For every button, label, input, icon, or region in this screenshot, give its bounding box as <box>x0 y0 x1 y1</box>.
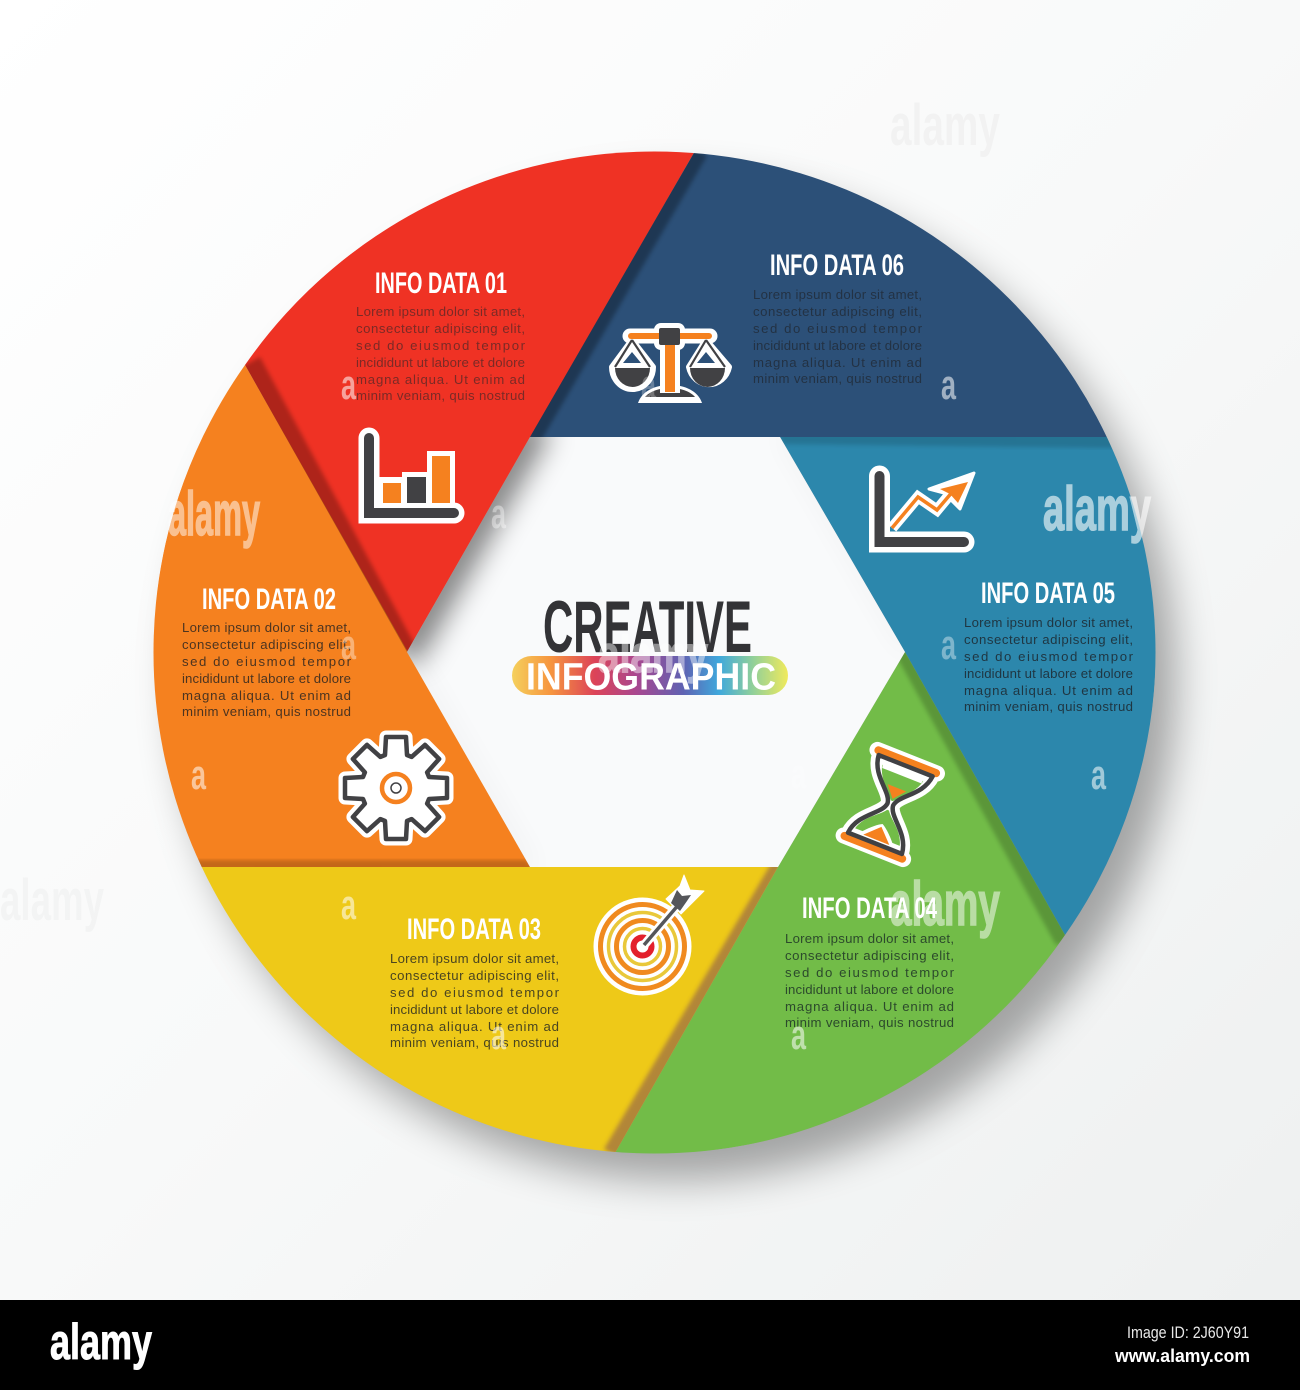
body 04 <box>785 931 955 1030</box>
watermarks: a <box>791 750 806 797</box>
body 06: magna aliqua. Ut enim ad <box>753 355 922 370</box>
body 02: consectetur adipiscing elit, <box>182 637 351 652</box>
rainbow pill: infographic: INFOGRAPHIC <box>526 656 776 698</box>
segment: info data 05 blue <box>780 437 1156 935</box>
title: creative infographic <box>512 587 788 698</box>
icon: bar chart <box>369 438 455 513</box>
body 06: incididunt ut labore et dolore <box>753 338 922 353</box>
body 01: sed do eiusmod tempor <box>356 338 526 353</box>
heading 03: INFO DATA 03 <box>407 913 541 946</box>
watermarks: a <box>491 1011 506 1058</box>
body 04: magna aliqua. Ut enim ad <box>785 999 954 1014</box>
body 01: minim veniam, quis nostrud <box>356 388 525 403</box>
watermarks: a <box>341 361 356 408</box>
watermarks: a <box>491 490 506 537</box>
heading 05: INFO DATA 05 <box>981 577 1115 610</box>
body 01: Lorem ipsum dolor sit amet, <box>356 304 525 319</box>
icon: target with arrow <box>594 875 704 996</box>
website: www.alamy.com <box>1114 1346 1250 1366</box>
watermarks: a <box>191 751 206 798</box>
body 03 <box>390 951 560 1050</box>
body 01: magna aliqua. Ut enim ad <box>356 372 525 387</box>
body 03: incididunt ut labore et dolore <box>390 1002 559 1017</box>
body 06: Lorem ipsum dolor sit amet, <box>753 287 922 302</box>
footer logo: alamy <box>50 1314 152 1370</box>
heading 01: INFO DATA 01 <box>375 267 507 300</box>
watermarks: a <box>1091 751 1106 798</box>
watermarks <box>0 93 1151 1058</box>
watermarks: a <box>791 1011 806 1058</box>
body 02: sed do eiusmod tempor <box>182 654 352 669</box>
watermarks: a <box>341 881 356 928</box>
body 01 <box>356 304 526 403</box>
heading 02: INFO DATA 02 <box>202 583 336 616</box>
body 04: incididunt ut labore et dolore <box>785 982 954 997</box>
watermarks: alamy <box>890 93 1000 158</box>
text block: info data 03 <box>390 913 560 1050</box>
watermarks: alamy <box>890 870 1000 939</box>
watermarks: alamy <box>598 626 708 684</box>
body 02: Lorem ipsum dolor sit amet, <box>182 620 351 635</box>
body 01: consectetur adipiscing elit, <box>356 321 525 336</box>
body 04: sed do eiusmod tempor <box>785 965 955 980</box>
body 03: sed do eiusmod tempor <box>390 985 560 1000</box>
icon: trend chart <box>880 473 974 542</box>
segment: info data 01 red <box>245 150 695 652</box>
watermarks: a <box>641 361 656 408</box>
icon: gear <box>345 737 447 839</box>
center hexagon <box>402 422 912 872</box>
watermarks: a <box>341 621 356 668</box>
body 02 <box>182 620 352 719</box>
footer bar <box>0 1300 1300 1390</box>
icon: scales <box>612 323 729 403</box>
body 05: magna aliqua. Ut enim ad <box>964 683 1133 698</box>
body 06 <box>753 287 923 386</box>
image id: Image ID: 2J60Y91 <box>1127 1323 1249 1342</box>
body 05: incididunt ut labore et dolore <box>964 666 1133 681</box>
watermarks: alamy <box>0 868 104 933</box>
text block: info data 05 <box>964 577 1134 714</box>
segment: info data 03 yellow <box>200 867 778 1153</box>
body 03: consectetur adipiscing elit, <box>390 968 559 983</box>
body 05: minim veniam, quis nostrud <box>964 699 1133 714</box>
body 04: Lorem ipsum dolor sit amet, <box>785 931 954 946</box>
heading: creative: CREATIVE <box>543 587 752 668</box>
wheel drop shadow <box>176 180 1176 1180</box>
body 03: magna aliqua. Ut enim ad <box>390 1019 559 1034</box>
body 04: minim veniam, quis nostrud <box>785 1015 954 1030</box>
body 05 <box>964 615 1134 714</box>
text block: info data 04 <box>785 892 955 1030</box>
text block: info data 02 <box>182 583 352 719</box>
body 01: incididunt ut labore et dolore <box>356 355 525 370</box>
segment: info data 06 navy <box>530 151 1110 437</box>
text block: info data 01 <box>356 267 526 403</box>
watermarks: alamy <box>1043 475 1151 544</box>
body 03: Lorem ipsum dolor sit amet, <box>390 951 559 966</box>
icon: hourglass <box>844 750 937 859</box>
heading 04: INFO DATA 04 <box>802 892 937 925</box>
body 03: minim veniam, quis nostrud <box>390 1035 559 1050</box>
body 05: sed do eiusmod tempor <box>964 649 1134 664</box>
body 05: consectetur adipiscing elit, <box>964 632 1133 647</box>
body 06: consectetur adipiscing elit, <box>753 304 922 319</box>
segment: info data 04 green <box>615 652 1065 1154</box>
segment: info data 02 orange <box>153 365 530 867</box>
body 02: incididunt ut labore et dolore <box>182 671 351 686</box>
text block: info data 06 <box>753 249 923 386</box>
body 06: minim veniam, quis nostrud <box>753 371 922 386</box>
body 05: Lorem ipsum dolor sit amet, <box>964 615 1133 630</box>
body 02: minim veniam, quis nostrud <box>182 704 351 719</box>
body 04: consectetur adipiscing elit, <box>785 948 954 963</box>
segment wheel <box>153 146 1156 1158</box>
body 06: sed do eiusmod tempor <box>753 321 923 336</box>
watermarks: a <box>941 621 956 668</box>
body 02: magna aliqua. Ut enim ad <box>182 688 351 703</box>
watermarks: a <box>941 361 956 408</box>
heading 06: INFO DATA 06 <box>770 249 904 282</box>
watermarks: alamy <box>168 480 260 549</box>
